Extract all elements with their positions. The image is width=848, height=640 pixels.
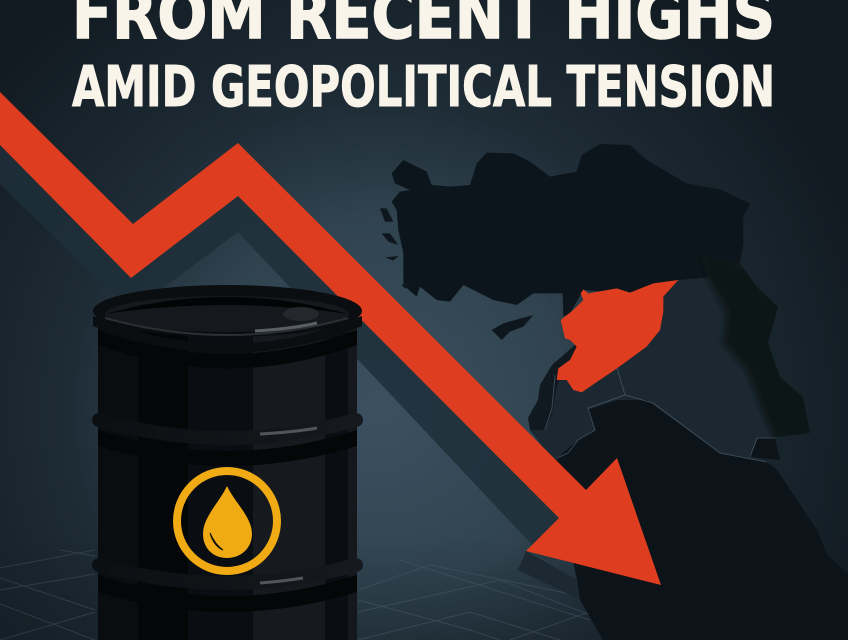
map: Gulf Kuwait corner [750, 437, 780, 460]
barrel rib upper [99, 420, 356, 438]
falling red arrow [0, 92, 661, 585]
map: Saudi Arabia [557, 400, 848, 640]
map: Aegean islands [380, 208, 417, 288]
barrel body [98, 315, 357, 640]
map: Iran [705, 264, 810, 437]
title [72, 0, 775, 120]
map of the Middle East [380, 144, 848, 640]
icon: oil drop badge [177, 471, 277, 571]
floor grid [0, 540, 848, 640]
map: Cyprus [492, 315, 533, 340]
map: country borders [545, 368, 775, 462]
map: Syria highlighted [557, 280, 678, 392]
oil barrel [93, 285, 362, 640]
rim highlight [255, 323, 317, 331]
arrow shadow [0, 145, 559, 548]
map: Turkey [392, 144, 750, 317]
map: Sinai shadow [518, 551, 580, 600]
barrel top rim [93, 285, 362, 353]
map: mid-tone lands [530, 277, 775, 480]
map: Israel and Lebanon coast [528, 345, 582, 430]
barrel rib lower [99, 565, 356, 583]
